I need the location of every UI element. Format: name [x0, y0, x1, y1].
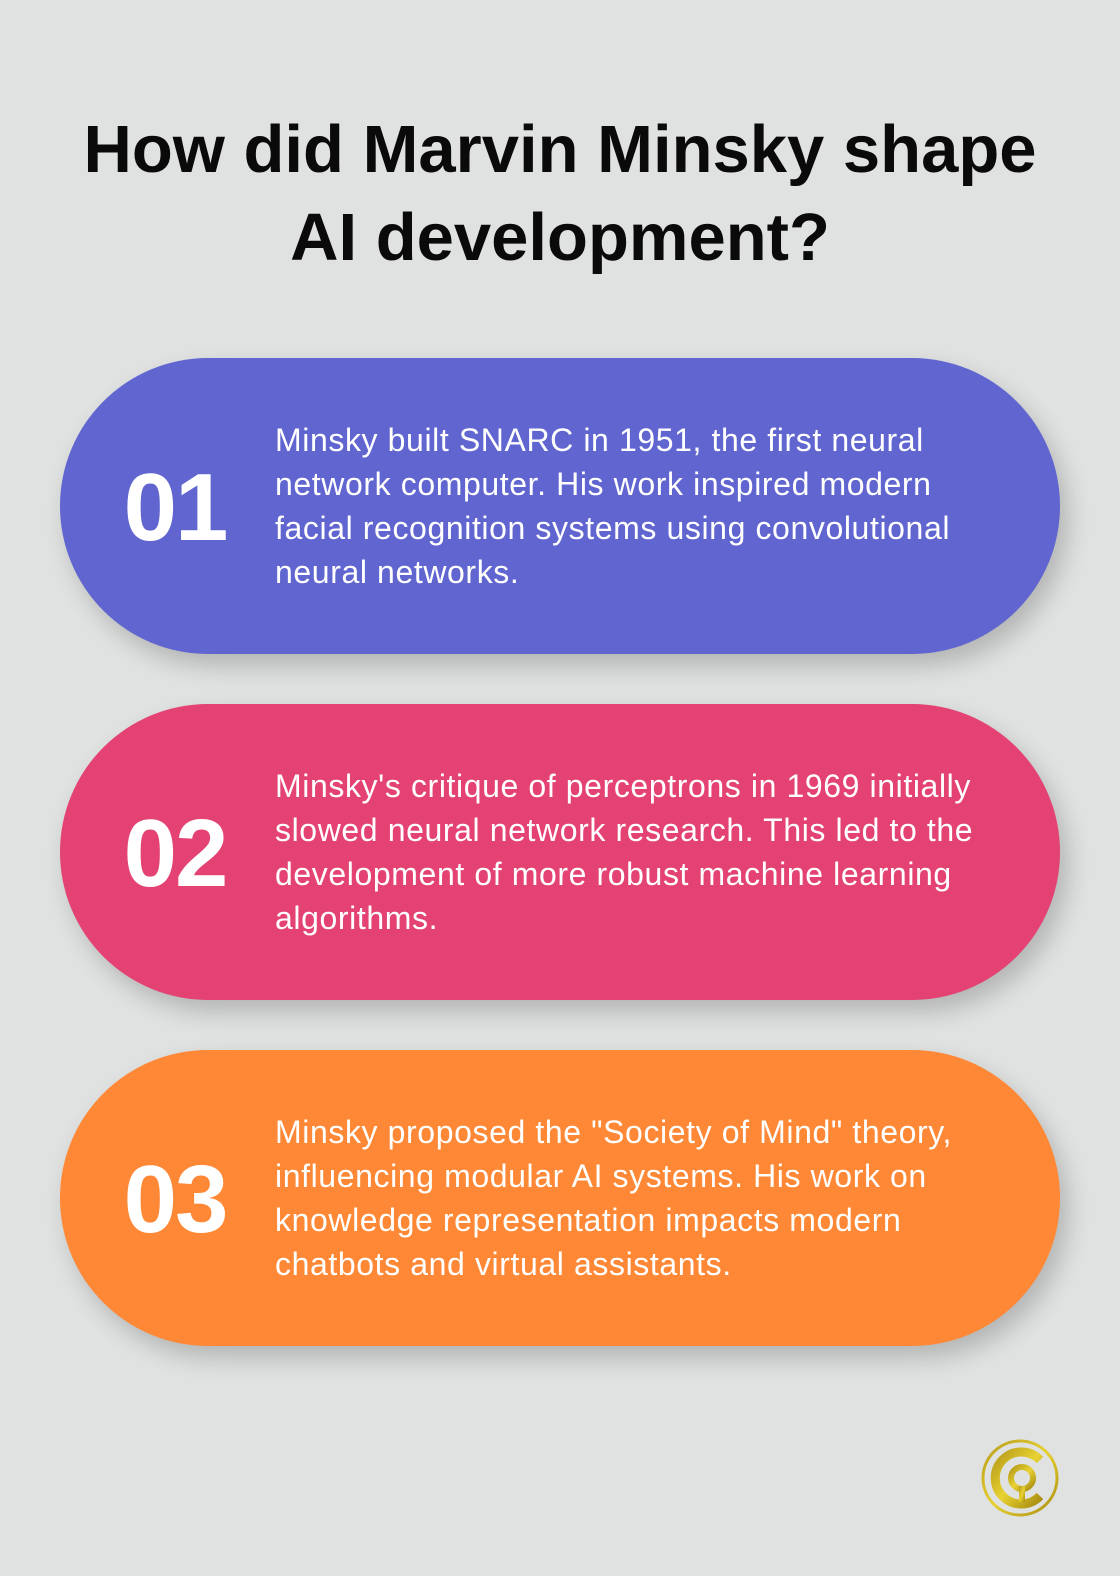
text 1: facial recognition systems using convolutional — [275, 510, 950, 546]
text 3: influencing modular AI systems. His work on — [275, 1158, 927, 1194]
title: How did Marvin Minsky shape — [83, 112, 1037, 187]
text 3: Minsky proposed the "Society of Mind" theory, — [275, 1114, 952, 1150]
text 3 — [275, 1114, 952, 1282]
text 1 — [275, 422, 950, 590]
number 03: 03 — [124, 1146, 226, 1253]
card 2 — [60, 704, 1060, 1000]
text 3: chatbots and virtual assistants. — [275, 1246, 732, 1282]
icon: logo — [982, 1440, 1058, 1516]
card 1 — [60, 358, 1060, 654]
text 2: algorithms. — [275, 900, 438, 936]
text 2: slowed neural network research. This led to the — [275, 812, 973, 848]
number 01: 01 — [124, 454, 226, 561]
title: AI development? — [290, 200, 830, 275]
text 2 — [275, 768, 973, 936]
text 2: development of more robust machine learning — [275, 856, 952, 892]
text 2: Minsky's critique of perceptrons in 1969 initially — [275, 768, 971, 804]
text 3: knowledge representation impacts modern — [275, 1202, 901, 1238]
card 3 — [60, 1050, 1060, 1346]
text 1: neural networks. — [275, 554, 519, 590]
text 1: Minsky built SNARC in 1951, the first neural — [275, 422, 924, 458]
number 02: 02 — [124, 800, 226, 907]
text 1: network computer. His work inspired modern — [275, 466, 932, 502]
title — [83, 112, 1037, 275]
